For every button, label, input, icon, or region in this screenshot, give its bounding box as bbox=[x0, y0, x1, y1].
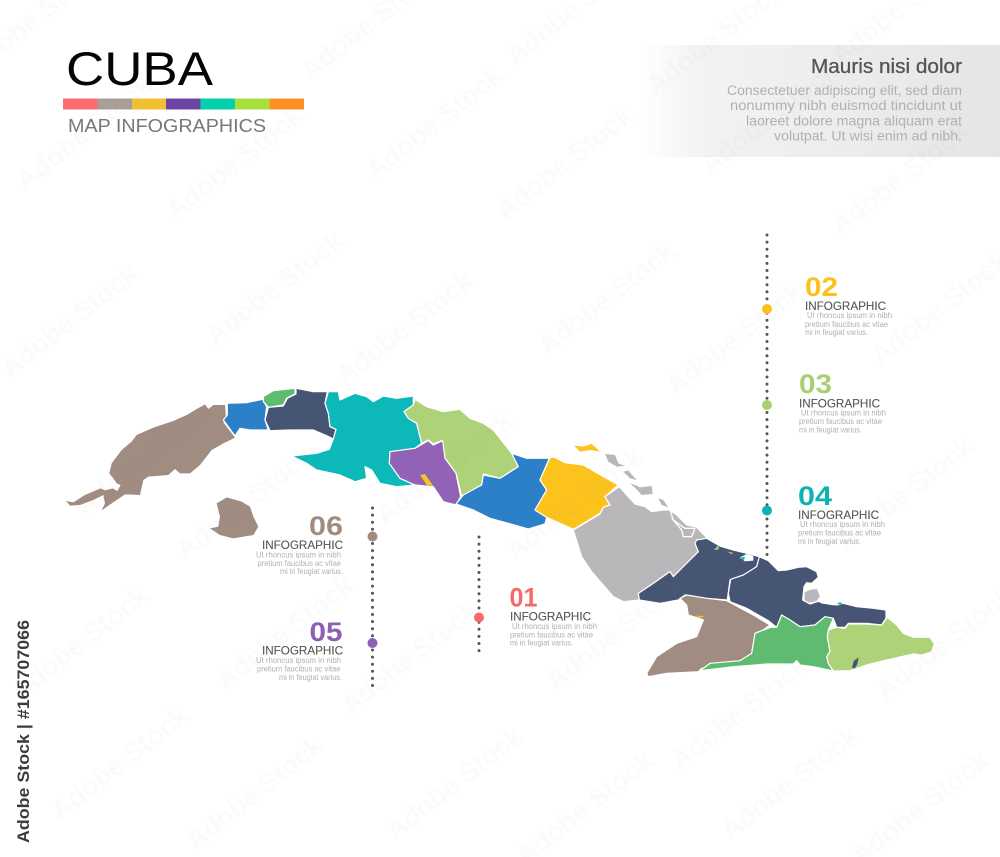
bay: Guantanamo bbox=[852, 657, 859, 669]
marker 01 bbox=[474, 612, 484, 622]
panel body text: laoreet dolore magna aliquam erat bbox=[746, 114, 962, 128]
text 02: mi in feugiat varius. bbox=[805, 328, 868, 337]
marker 06 bbox=[368, 532, 378, 542]
stock watermark tiles: Adobe Stock bbox=[825, 115, 974, 241]
province: Las Tunas bbox=[638, 538, 759, 603]
callouts 05 and 06 with shared dotted line bbox=[256, 508, 378, 686]
bay: Granma bbox=[695, 616, 704, 618]
callout 04 bbox=[762, 481, 885, 546]
far eastern provinces bbox=[647, 545, 934, 677]
number 03: 03 bbox=[799, 369, 832, 399]
province: Granma bbox=[647, 595, 770, 677]
province: Santiago de Cuba bbox=[700, 615, 833, 671]
bay: Cienfuegos bbox=[420, 474, 433, 486]
marker 02 bbox=[762, 304, 772, 314]
text 02 bbox=[805, 311, 892, 337]
text 05: Ut rhoncus ipsum in nibh bbox=[256, 656, 341, 665]
panel: intro text bbox=[646, 45, 1000, 157]
panel heading: Mauris nisi dolor bbox=[811, 56, 962, 78]
eastern provinces bbox=[456, 444, 759, 603]
province: Mayabeque bbox=[265, 388, 336, 439]
text 01: mi in feugiat varius. bbox=[510, 638, 573, 648]
marker 04 bbox=[762, 506, 772, 516]
heading 04: INFOGRAPHIC bbox=[798, 508, 879, 522]
marker 05 bbox=[368, 638, 378, 648]
heading 03: INFOGRAPHIC bbox=[799, 396, 880, 410]
dotted line 02-04 bbox=[766, 235, 768, 555]
text 06: pretium faucibus ac vitae bbox=[258, 559, 342, 568]
stock watermark tiles: Adobe Stock bbox=[210, 570, 359, 696]
marker 03 bbox=[762, 400, 772, 410]
stock watermark tiles: Adobe Stock bbox=[45, 700, 194, 826]
callout 03 bbox=[762, 369, 886, 434]
text 06 bbox=[256, 550, 343, 576]
province: Villa Clara bbox=[404, 399, 518, 496]
stock watermark tiles: Adobe Stock bbox=[70, 395, 219, 521]
stock watermark tiles: Adobe Stock bbox=[170, 440, 319, 566]
province: Cienfuegos bbox=[389, 441, 461, 505]
text 04: mi in feugiat varius. bbox=[798, 537, 861, 546]
panel body text: nonummy nibh euismod tincidunt ut bbox=[730, 98, 962, 113]
stock watermark tiles: Adobe Stock bbox=[360, 60, 509, 186]
stock watermark tiles: Adobe Stock bbox=[715, 720, 864, 846]
text 01 bbox=[510, 622, 597, 648]
stock watermark tiles: Adobe Stock bbox=[540, 570, 689, 696]
heading 05: INFOGRAPHIC bbox=[262, 644, 343, 658]
stock watermark tiles: Adobe Stock bbox=[665, 650, 814, 776]
panel body text bbox=[727, 83, 962, 144]
dotted line 05-06 bbox=[371, 508, 374, 686]
stock watermark tiles: Adobe Stock bbox=[180, 730, 329, 856]
text 05: pretium faucibus ac vitae bbox=[257, 664, 341, 674]
text 05: mi in feugiat varius. bbox=[279, 673, 342, 682]
text 04: Ut rhoncus ipsum in nibh bbox=[800, 520, 885, 529]
number 05: 05 bbox=[310, 617, 342, 647]
province: Matanzas bbox=[292, 392, 422, 487]
number 06: 06 bbox=[309, 511, 343, 541]
text 02: Ut rhoncus ipsum in nibh bbox=[807, 311, 892, 320]
dotted line 01 bbox=[478, 537, 480, 654]
bay details: Holguin bbox=[714, 545, 843, 605]
number 02: 02 bbox=[805, 272, 838, 302]
title: CUBA bbox=[66, 42, 214, 95]
stock watermark tiles: Adobe Stock bbox=[500, 440, 649, 566]
province: Sancti Spiritus bbox=[456, 453, 549, 529]
stock watermark tiles: Adobe Stock bbox=[330, 265, 479, 391]
text 02: pretium faucibus ac vitae bbox=[805, 320, 889, 329]
stock watermark tiles: Adobe Stock bbox=[370, 405, 519, 531]
mangrove channels: Camaguey bbox=[670, 510, 695, 537]
stock watermark tiles: Adobe Stock bbox=[660, 275, 809, 401]
stock watermark tiles: Adobe Stock bbox=[380, 720, 529, 846]
stock watermark tiles: Adobe Stock bbox=[695, 55, 844, 181]
text 04 bbox=[798, 520, 885, 546]
heading 06: INFOGRAPHIC bbox=[262, 538, 343, 552]
text 03: mi in feugiat varius. bbox=[799, 426, 862, 434]
colour bar bbox=[63, 98, 304, 110]
number 01: 01 bbox=[510, 582, 538, 612]
panel body text: Consectetuer adipiscing elit, sed diam bbox=[727, 83, 962, 98]
province: Artemisa bbox=[223, 399, 268, 436]
number 04: 04 bbox=[798, 481, 832, 511]
stock watermark tiles: Adobe Stock bbox=[335, 595, 484, 721]
text 03: Ut rhoncus ipsum in nibh bbox=[801, 408, 886, 418]
callout 01 bbox=[474, 537, 597, 654]
map: Cuba provinces bbox=[66, 388, 934, 677]
text 06: Ut rhoncus ipsum in nibh bbox=[256, 550, 341, 560]
text 03 bbox=[799, 408, 886, 434]
heading 02: INFOGRAPHIC bbox=[805, 299, 886, 313]
island: Isla de la Juventud bbox=[210, 497, 258, 538]
callout 02 bbox=[762, 272, 892, 337]
text 06: mi in feugiat varius. bbox=[280, 567, 343, 576]
text 03: pretium faucibus ac vitae bbox=[799, 417, 883, 426]
text 05 bbox=[256, 656, 342, 682]
stock watermark tiles: Adobe Stock bbox=[490, 100, 639, 226]
province: Holguin bbox=[728, 557, 886, 627]
callout 06 bbox=[256, 511, 378, 576]
text 04: pretium faucibus ac vitae bbox=[798, 528, 882, 538]
cay: Ciego de Avila bbox=[574, 444, 600, 452]
province: Ciego de Avila bbox=[535, 457, 618, 529]
province: Pinar del Rio bbox=[66, 404, 235, 510]
province: Guantanamo bbox=[827, 617, 934, 671]
province: Camaguey bbox=[573, 487, 708, 602]
text 01: Ut rhoncus ipsum in nibh bbox=[512, 622, 597, 631]
stock watermark tiles: Adobe Stock bbox=[532, 235, 681, 361]
panel body text: volutpat. Ut wisi enim ad nibh. bbox=[774, 128, 962, 144]
text 01: pretium faucibus ac vitae bbox=[510, 630, 594, 640]
province: Havana bbox=[263, 388, 295, 407]
subtitle: MAP INFOGRAPHICS bbox=[68, 116, 266, 136]
heading 01: INFOGRAPHIC bbox=[510, 610, 591, 624]
stock watermark tiles: Adobe Stock bbox=[5, 580, 154, 706]
callouts 02 to 04 with shared dotted line bbox=[762, 235, 892, 555]
stock id credit: Adobe Stock | #165707066 bbox=[14, 620, 33, 843]
western and central provinces bbox=[210, 388, 518, 538]
stock watermark tiles: Adobe Stock bbox=[830, 430, 979, 556]
stock watermark tiles: Adobe Stock bbox=[160, 100, 309, 226]
stock watermark tiles: Adobe Stock bbox=[200, 225, 349, 351]
cays: Camaguey bbox=[605, 454, 668, 507]
stock watermark tiles: Adobe Stock bbox=[10, 70, 159, 196]
callout 05 bbox=[256, 617, 378, 682]
